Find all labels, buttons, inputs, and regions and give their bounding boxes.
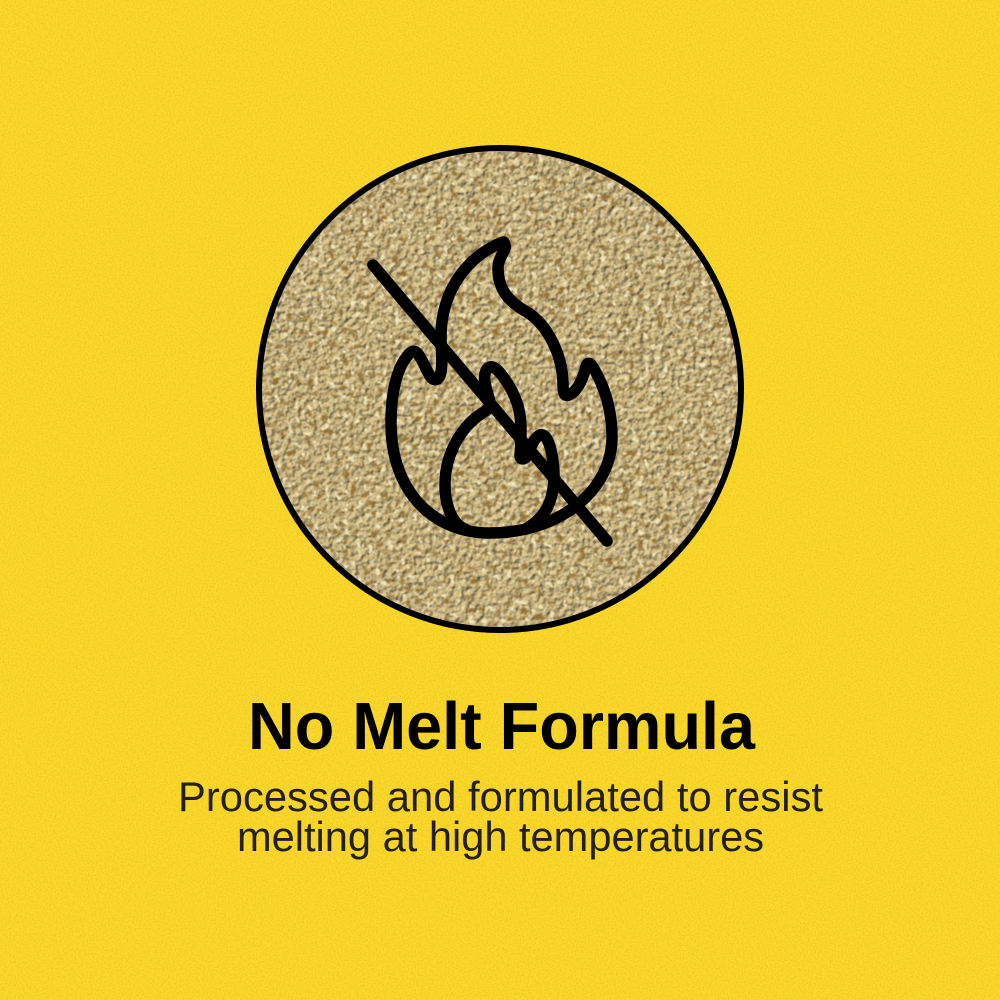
description text: melting at high temperatures <box>237 813 764 860</box>
outer flame outline <box>391 242 612 533</box>
circle: ground grain texture with black outline <box>255 145 745 635</box>
title: No Melt Formula <box>248 689 756 764</box>
slash <box>373 265 607 541</box>
description text: Processed and formulated to resist <box>178 773 823 820</box>
icon: crossed-out flame <box>373 242 612 541</box>
inner flame outline <box>445 367 554 529</box>
description text <box>178 773 823 860</box>
